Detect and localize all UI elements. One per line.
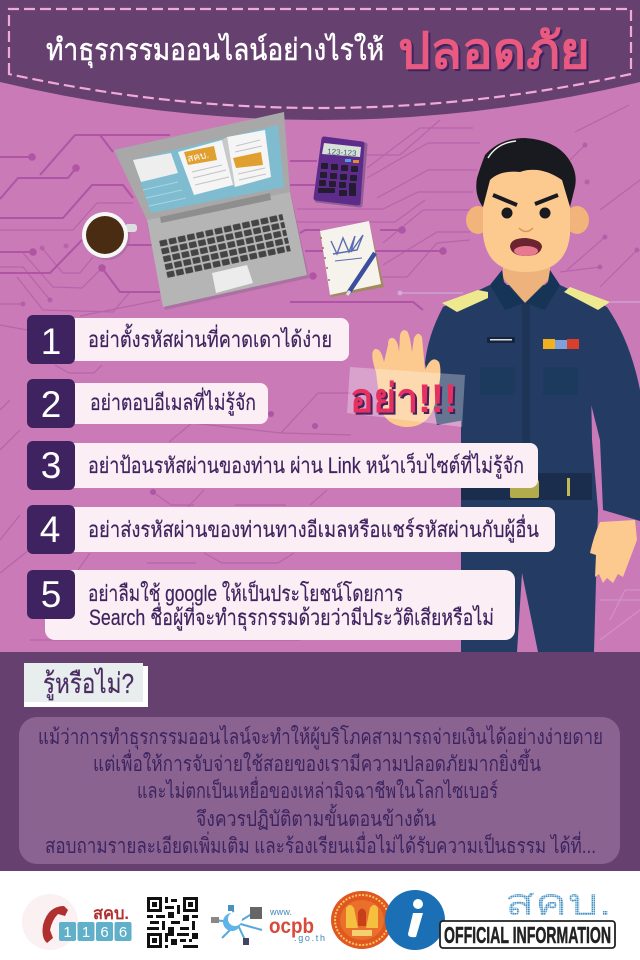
- title: safe: ปลอดภัย: [398, 23, 590, 79]
- coffee cup: [82, 212, 137, 260]
- placket: [522, 303, 530, 473]
- website logo: ocpb: [269, 915, 314, 938]
- hotline logo: [22, 894, 132, 950]
- laptop: [114, 112, 309, 310]
- mouth: [510, 238, 542, 256]
- rule 4: [27, 505, 555, 554]
- rule 1: 1: [41, 321, 61, 362]
- keyboard: [158, 213, 291, 279]
- legs and torso: [461, 330, 598, 652]
- rule 4: อย่าส่งรหัสผ่านของท่านทางอีเมลหรือแชร์รหัสผ่านกับผู้อื่น: [88, 514, 539, 543]
- calculator: [316, 139, 365, 205]
- shoulders: [443, 285, 607, 340]
- explanation box: จึงควรปฏิบัติตามขั้นตอนข้างต้น: [196, 804, 436, 831]
- right arm: [575, 300, 640, 521]
- rule 5: 5: [41, 574, 61, 615]
- circuit nodes: [20, 142, 640, 495]
- calculator: 123-123: [327, 147, 357, 158]
- website logo: www.: [269, 907, 292, 917]
- hotline logo: 1: [63, 924, 72, 941]
- left arm: [425, 285, 490, 425]
- epaulettes: [442, 290, 488, 312]
- laptop: สคบ.: [186, 150, 210, 165]
- dashed stitching: [9, 9, 631, 108]
- did you know panel: [0, 652, 640, 871]
- website logo: .go.th: [294, 933, 325, 943]
- raised hand: [372, 330, 440, 427]
- rule 5: Search ชื่อผู้ที่จะทำธุรกรรมด้วยว่ามีประวัติเสียหรือไม่: [89, 602, 494, 631]
- explanation box: และไม่ตกเป็นเหยื่อของเหล่ามิจฉาชีพในโลกไซเบอร์: [137, 776, 498, 803]
- name tag: [487, 337, 515, 343]
- officer: [372, 138, 640, 652]
- website logo: [211, 905, 325, 945]
- warning text: อย่า!!!: [352, 379, 459, 423]
- laptop screen: [114, 112, 290, 220]
- warning panel: อย่า!!!: [350, 377, 457, 421]
- title: safe: ปลอดภัย: [400, 25, 592, 81]
- info icon: [385, 890, 445, 950]
- footer: [0, 871, 640, 960]
- nose: [519, 228, 533, 232]
- eyes: [502, 208, 512, 218]
- ribbons: [543, 339, 579, 349]
- rule 2: [27, 379, 268, 428]
- hotline logo: 1: [82, 924, 90, 941]
- OCPB lettering: สคบ.: [505, 882, 612, 924]
- rule 5: [27, 570, 515, 640]
- belt: [461, 473, 592, 500]
- rule 1: อย่าตั้งรหัสผ่านที่คาดเดาได้ง่าย: [88, 324, 332, 352]
- rule 3: 3: [41, 445, 61, 486]
- rule 3: [27, 441, 538, 490]
- hotline logo: 6: [119, 924, 127, 941]
- hotline logo: สคบ.: [93, 904, 129, 923]
- pockets: [480, 367, 578, 395]
- panel heading: [24, 663, 148, 707]
- rule 3: อย่าป้อนรหัสผ่านของท่าน ผ่าน Link หน้าเว็บไซต์ที่ไม่รู้จัก: [88, 450, 524, 479]
- ears: [466, 206, 490, 234]
- rule 2: อย่าตอบอีเมลที่ไม่รู้จัก: [90, 387, 256, 416]
- rule 2: 2: [41, 384, 61, 425]
- title: lead line: ทำธุรกรรมออนไลน์อย่างไรให้: [46, 32, 384, 69]
- rule 4: 4: [40, 509, 60, 550]
- face: [483, 170, 570, 272]
- circuit pattern: thin lines: [0, 105, 640, 640]
- hotline logo: 6: [100, 924, 109, 941]
- rule 1: [27, 315, 349, 364]
- explanation box: แต่เพื่อให้การจับจ่ายใช้สอยของเรามีความปลอดภัยมากยิ่งขึ้น: [93, 749, 541, 776]
- hair: [476, 138, 576, 207]
- explanation box: [19, 717, 620, 864]
- right hand: [590, 520, 637, 583]
- collar: [490, 270, 525, 310]
- laptop base: [147, 192, 307, 307]
- brows: [493, 195, 558, 205]
- government seal: [331, 891, 393, 949]
- panel heading: รู้หรือไม่?: [43, 668, 134, 701]
- trackpad: [212, 265, 253, 293]
- neck: [503, 262, 550, 303]
- QR code: [147, 897, 198, 948]
- notebook and pen: [320, 221, 384, 297]
- circuit pattern: strong lines: [0, 135, 443, 310]
- warning panel: [347, 367, 465, 427]
- header banner: [0, 0, 640, 120]
- rule 5: อย่าลืมใช้ google ให้เป็นประโยชน์โดยการ: [88, 579, 403, 606]
